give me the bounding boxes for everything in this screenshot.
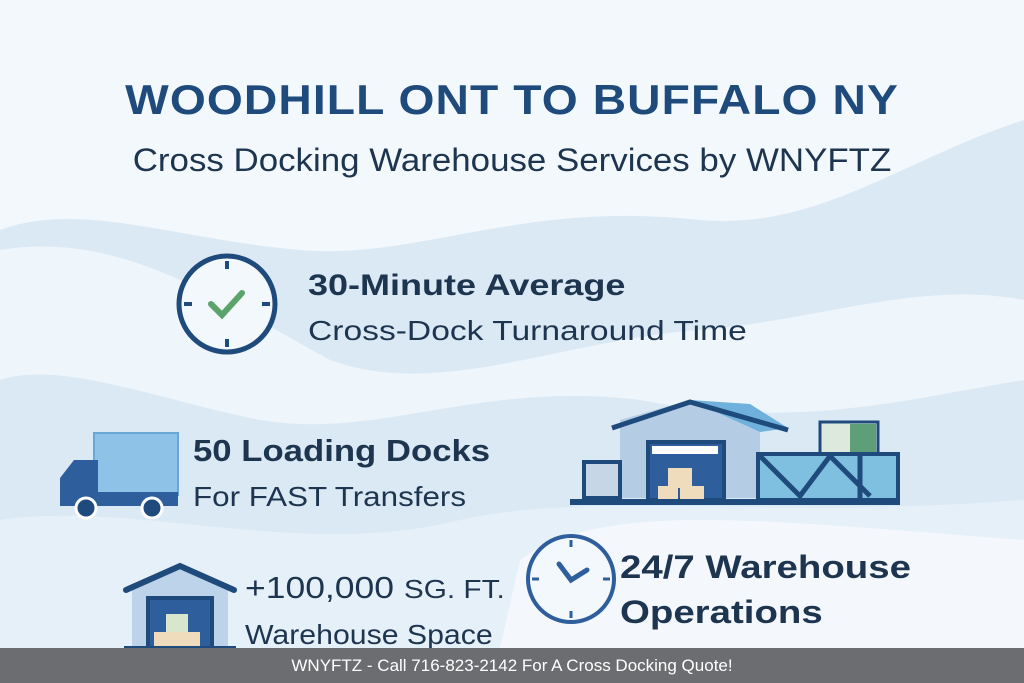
text: 24/7: 24/7 Warehouse [620, 549, 911, 585]
icon: clock [526, 534, 616, 624]
subtitle: Cross Docking Warehouse Services by WNYFTZ [133, 142, 891, 178]
text: 24/7 [620, 549, 911, 630]
icon: clock with check [176, 254, 278, 354]
text: warehouse space: +100,000 SG. FT. [245, 570, 505, 605]
icon: truck [60, 432, 179, 520]
text: loading docks [193, 433, 490, 512]
text: turnaround: 30-Minute Average [308, 269, 625, 302]
text: loading docks: 50 Loading Docks [193, 433, 490, 468]
text: turnaround: Cross-Dock Turnaround Time [308, 315, 747, 346]
footer bar [0, 648, 1024, 683]
icon: small warehouse [123, 562, 237, 648]
text: 24/7: Operations [620, 594, 823, 630]
text: loading docks: For FAST Transfers [193, 481, 466, 512]
footer bar: WNYFTZ - Call 716-823-2142 For A Cross Docking Quote! [291, 656, 733, 675]
text: warehouse space: Warehouse Space [245, 619, 493, 650]
icon: large warehouse [570, 399, 900, 505]
title: WOODHILL ONT TO BUFFALO NY [125, 76, 899, 123]
text: warehouse space [245, 570, 505, 650]
text: turnaround [308, 269, 747, 346]
